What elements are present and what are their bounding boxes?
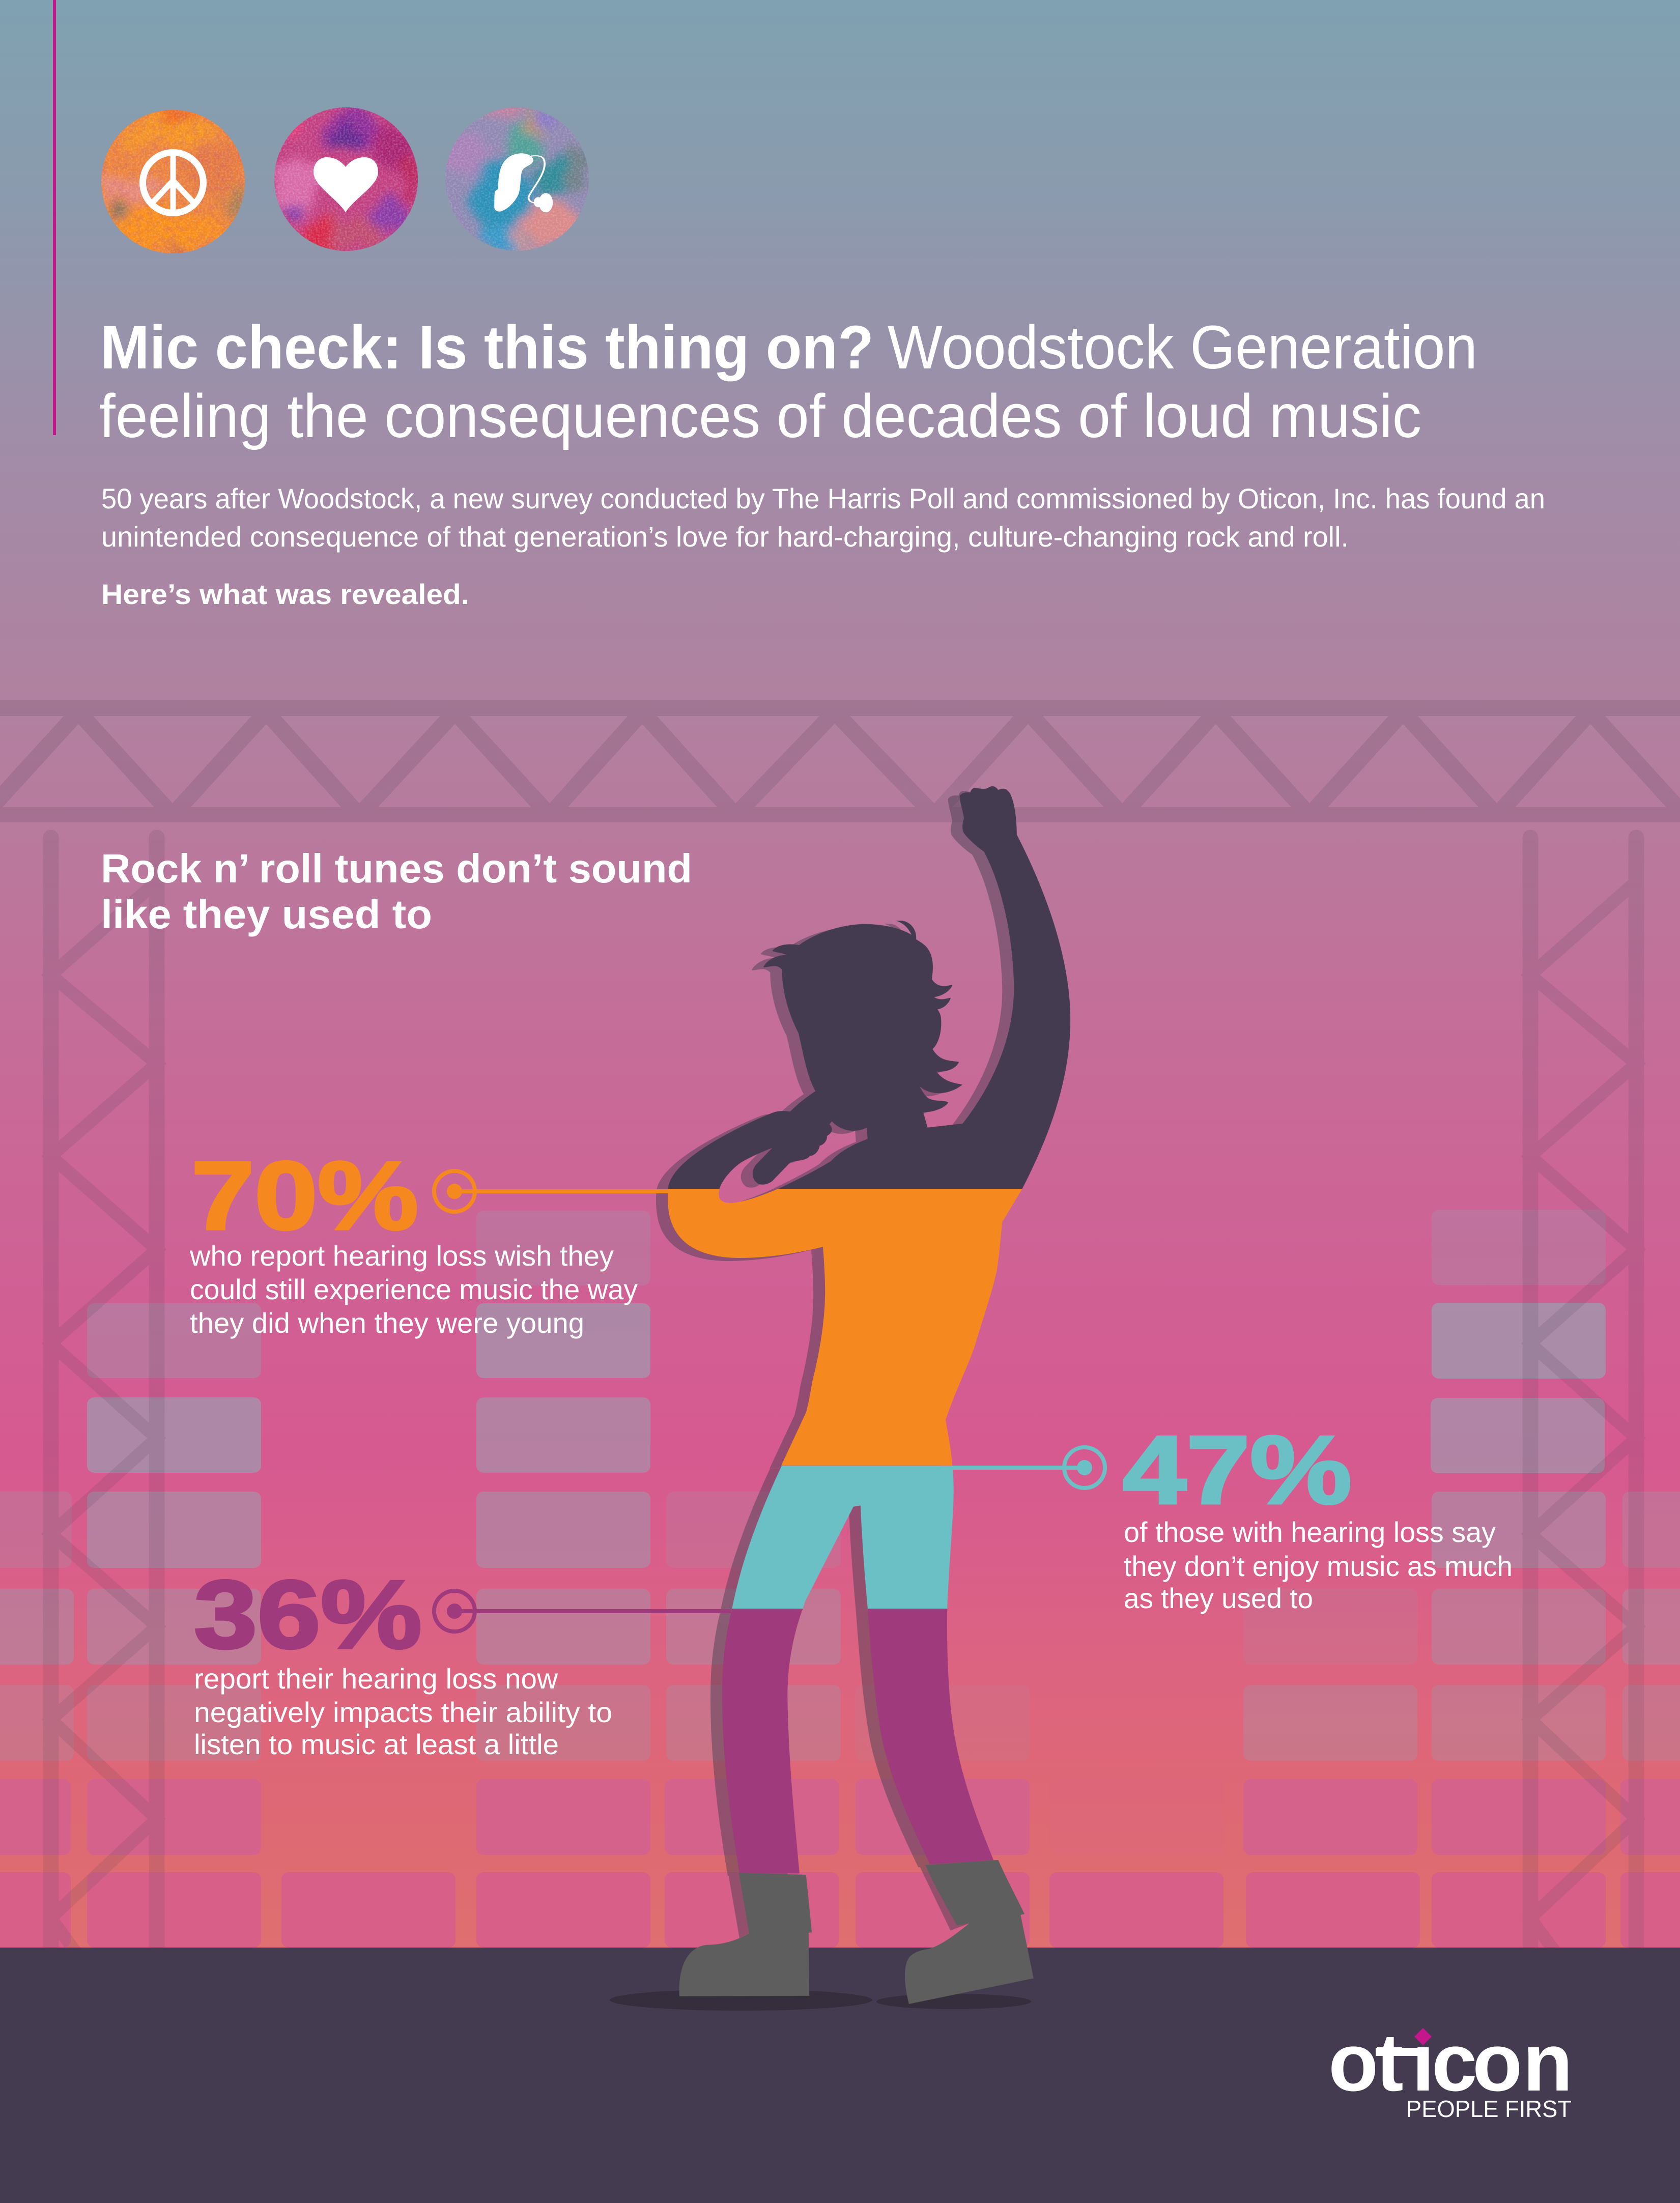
caption: listen to music at least a little <box>194 1728 559 1760</box>
oticon logo: oticon <box>1328 2017 1573 2108</box>
caption: who report hearing loss wish they <box>189 1240 614 1272</box>
caption <box>194 1663 612 1760</box>
callout: 70 percent <box>189 1142 668 1339</box>
figure: head and raised arm <box>668 786 1070 1189</box>
main title <box>99 312 1477 450</box>
figure 36 percent: 36% <box>194 1561 422 1669</box>
section heading: like they used to <box>101 892 432 937</box>
stage floor <box>0 1948 1680 2203</box>
figure 47 percent: 47% <box>1123 1416 1352 1524</box>
intro call to action: Here’s what was revealed. <box>101 578 469 610</box>
section heading: Rock n’ roll tunes don’t sound <box>101 846 692 891</box>
main title: Woodstock Generation <box>888 312 1477 382</box>
marker and connector <box>952 1447 1105 1488</box>
oticon logo: PEOPLE FIRST <box>1406 2096 1572 2122</box>
marker and connector <box>434 1171 668 1212</box>
main title: feeling the consequences of decades of loud music <box>99 381 1421 450</box>
figure: boots <box>679 1860 1034 2004</box>
icon: heart badge <box>270 107 419 255</box>
left stage tower <box>51 838 157 2010</box>
caption: report their hearing loss now <box>194 1663 558 1695</box>
dancing figure silhouette <box>668 786 1070 2004</box>
accent line <box>53 0 56 435</box>
intro paragraph: unintended consequence of that generation’s love for hard-charging, culture-changing rock and roll. <box>101 521 1349 553</box>
ground shadows under boots <box>610 1989 1031 2011</box>
section heading <box>101 846 692 937</box>
caption: as they used to <box>1124 1582 1313 1614</box>
figure: teal hips band <box>732 1466 954 1609</box>
figure drop shadow <box>656 789 1059 1938</box>
equalizer blocks backdrop <box>0 1210 1680 1948</box>
intro paragraph: 50 years after Woodstock, a new survey conducted by The Harris Poll and commissioned by Oticon, Inc. has found an <box>101 482 1545 514</box>
intro paragraph <box>101 482 1545 553</box>
marker and connector <box>434 1591 731 1632</box>
caption: negatively impacts their ability to <box>194 1696 612 1728</box>
main title: Mic check: Is this thing on? <box>100 312 874 382</box>
icon: hearing aid badge <box>445 103 591 254</box>
callout: 47 percent <box>952 1416 1513 1614</box>
icon: peace sign badge <box>99 105 245 254</box>
figure 70 percent: 70% <box>191 1142 418 1250</box>
caption: could still experience music the way <box>190 1273 638 1305</box>
figure: purple legs band <box>722 1609 993 1874</box>
figure: orange torso band <box>668 1189 1022 1466</box>
caption: of those with hearing loss say <box>1124 1516 1496 1548</box>
stage truss top <box>0 700 1680 822</box>
callout: 36 percent <box>194 1561 731 1760</box>
right stage tower <box>1530 838 1636 2010</box>
caption <box>1124 1516 1513 1614</box>
caption: they did when they were young <box>190 1307 584 1339</box>
caption <box>189 1240 638 1339</box>
caption: they don’t enjoy music as much <box>1124 1550 1513 1582</box>
